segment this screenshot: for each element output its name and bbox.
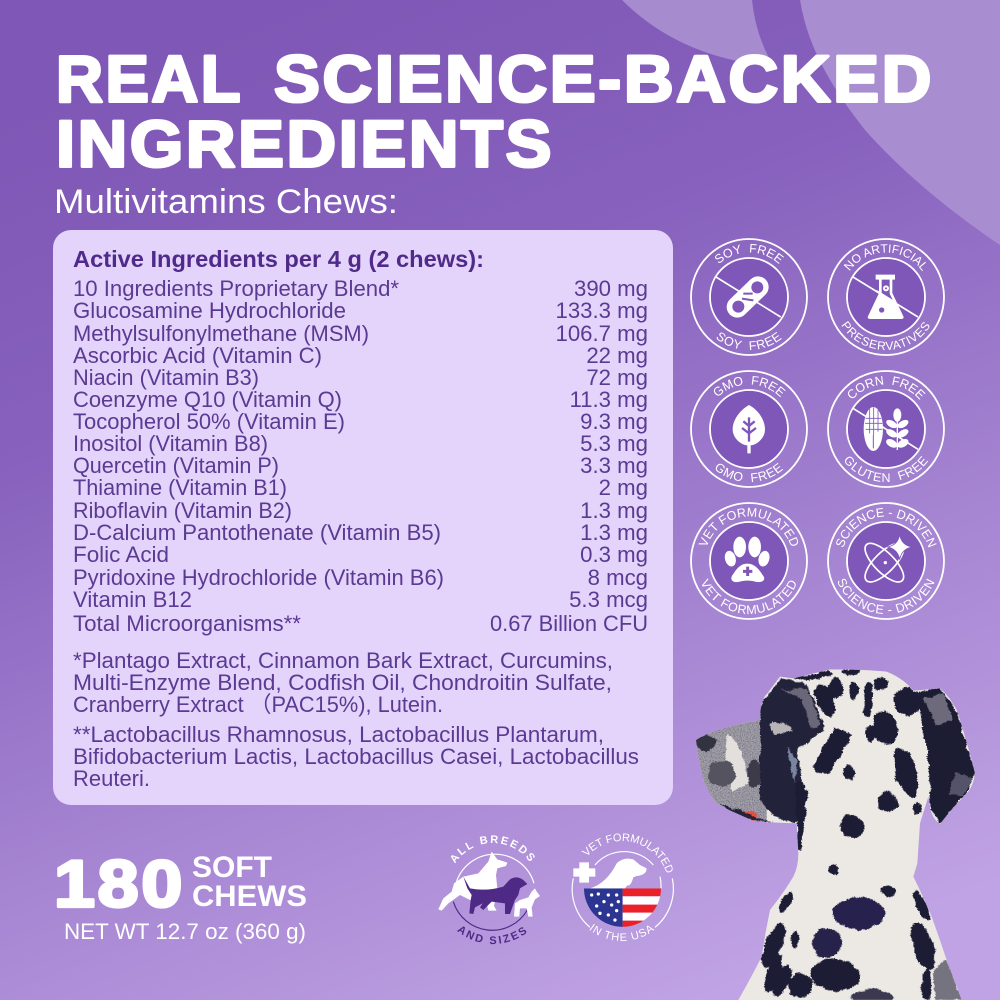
icon: soybean: [716, 277, 781, 317]
badge: vet formulated: VET FORMULATED: [698, 508, 798, 546]
ingredient names: D-Calcium Pantothenate (Vitamin B5): [73, 520, 441, 545]
ingredient names: Quercetin (Vitamin P): [73, 453, 279, 478]
logo: vet formulated in the usa: VET FORMULATED: [582, 833, 673, 872]
ingredient names: Glucosamine Hydrochloride: [73, 298, 346, 323]
ingredient amounts: 11.3 mg: [569, 387, 648, 412]
panel: ingredients: [53, 230, 673, 805]
panel heading: Active Ingredients per 4 g (2 chews):: [73, 246, 484, 272]
footnote: proprietary blend: [73, 648, 613, 717]
ingredient amounts: 1.3 mg: [580, 498, 648, 523]
ingredient amounts: 5.3 mg: [580, 431, 648, 456]
net weight: NET WT 12.7 oz (360 g): [64, 919, 306, 944]
ingredient names: 10 Ingredients Proprietary Blend*: [73, 276, 399, 301]
logo: all breeds and sizes: AND SIZES: [457, 926, 526, 944]
footnote: microorganisms: [73, 722, 639, 791]
badge: corn and gluten free: CORN FREE: [848, 376, 926, 400]
ingredient names: Coenzyme Q10 (Vitamin Q): [73, 387, 342, 412]
badge: vet formulated: VET FORMULATED: [702, 578, 796, 614]
ingredient amounts: 8 mcg: [588, 565, 648, 590]
ingredient amounts: 5.3 mcg: [569, 587, 648, 612]
logo: all breeds and sizes: ALL BREEDS: [451, 835, 535, 864]
icon: dog, plus and flag: [572, 852, 673, 929]
icon: leaf: [733, 405, 765, 453]
ingredient names: Thiamine (Vitamin B1): [73, 475, 287, 500]
badge: corn and gluten free: [827, 370, 945, 488]
ingredient amounts: 1.3 mg: [580, 520, 648, 545]
ingredient names: Pyridoxine Hydrochloride (Vitamin B6): [73, 565, 444, 590]
badge: gmo free: GMO FREE: [716, 462, 784, 482]
ingredient names: [73, 276, 444, 636]
badge: no artificial preservatives: PRESERVATIVES: [842, 321, 930, 350]
badge: gmo free: GMO FREE: [714, 376, 786, 398]
ingredient names: Inositol (Vitamin B8): [73, 431, 268, 456]
ingredient names: Folic Acid: [73, 542, 169, 567]
ingredient amounts: 2 mg: [599, 475, 648, 500]
footnote: microorganisms: **Lactobacillus Rhamnosus, Lactobacillus Plantarum,: [73, 722, 604, 747]
ears and spots: [757, 669, 975, 1000]
ingredient names: Tocopherol 50% (Vitamin E): [73, 409, 345, 434]
count: 180 soft chews: SOFT: [192, 851, 272, 884]
ingredient names: Total Microorganisms**: [73, 611, 301, 636]
badge: no artificial preservatives: [827, 238, 945, 356]
icon: three dogs: [438, 852, 540, 930]
logo: vet formulated in the usa: IN THE USA: [590, 924, 654, 942]
logo: all breeds and sizes: [438, 835, 540, 944]
ingredient names: Niacin (Vitamin B3): [73, 365, 259, 390]
decorative arc top left: [622, 0, 768, 62]
footnote: microorganisms: Bifidobacterium Lactis, Lactobacillus Casei, Lactobacillus: [73, 744, 639, 769]
ingredient amounts: 72 mg: [586, 365, 648, 390]
subtitle: Multivitamins Chews:: [54, 183, 398, 221]
ingredient amounts: 0.3 mg: [580, 542, 648, 567]
ingredient names: Methylsulfonylmethane (MSM): [73, 321, 369, 346]
title: SCIENCE-BACKED: [274, 42, 934, 116]
footnote: proprietary blend: *Plantago Extract, Cinnamon Bark Extract, Curcumins,: [73, 648, 613, 673]
ingredient amounts: 106.7 mg: [555, 321, 648, 346]
head muzzle: [696, 715, 767, 822]
badge: science driven: SCIENCE - DRIVEN: [838, 578, 934, 614]
badge: soy free: [690, 238, 808, 356]
ingredient names: Ascorbic Acid (Vitamin C): [73, 343, 322, 368]
logo: vet formulated in the usa: [572, 833, 674, 942]
title: REAL: [56, 42, 243, 116]
ingredient names: Vitamin B12: [73, 587, 192, 612]
count: 180 soft chews: 180: [54, 846, 185, 920]
ingredient names: Riboflavin (Vitamin B2): [73, 498, 292, 523]
decorative arc top right: [800, 0, 1000, 245]
icon: atom and star: [859, 536, 910, 588]
dog photo illustration: [696, 669, 975, 1000]
badge: no artificial preservatives: NO ARTIFICIAL: [844, 244, 926, 272]
spots: [757, 669, 962, 1000]
right ear: [913, 688, 975, 824]
icon: paw with plus: [723, 537, 771, 582]
fur body: [696, 670, 975, 1000]
left ear: [760, 678, 825, 823]
ingredient amounts: 0.67 Billion CFU: [490, 611, 648, 636]
footnote: proprietary blend: Multi-Enzyme Blend, Codfish Oil, Chondroitin Sulfate,: [73, 670, 612, 695]
ingredient amounts: 133.3 mg: [555, 298, 648, 323]
badge: gmo free: [690, 370, 808, 488]
ingredient amounts: 22 mg: [586, 343, 648, 368]
badge: science driven: SCIENCE - DRIVEN: [836, 508, 936, 548]
ingredient amounts: 390 mg: [574, 276, 648, 301]
badge: science driven: [827, 502, 945, 620]
footnote: microorganisms: Reuteri.: [73, 766, 150, 791]
count: 180 soft chews: CHEWS: [192, 880, 307, 913]
ingredient amounts: 9.3 mg: [580, 409, 648, 434]
icon: corn and wheat: [853, 407, 918, 451]
badge: corn and gluten free: GLUTEN FREE: [845, 456, 928, 482]
ingredient amounts: [490, 276, 648, 636]
title: [56, 42, 934, 180]
icon: flask: [853, 275, 918, 319]
badge: vet formulated: [690, 502, 808, 620]
count: 180 soft chews: [54, 846, 307, 920]
badge: soy free: SOY FREE: [716, 332, 782, 350]
footnote: proprietary blend: Cranberry Extract （PAC15%), Lutein.: [73, 692, 443, 717]
title: INGREDIENTS: [56, 106, 554, 180]
badge: soy free: SOY FREE: [715, 244, 784, 264]
ingredient amounts: 3.3 mg: [580, 453, 648, 478]
